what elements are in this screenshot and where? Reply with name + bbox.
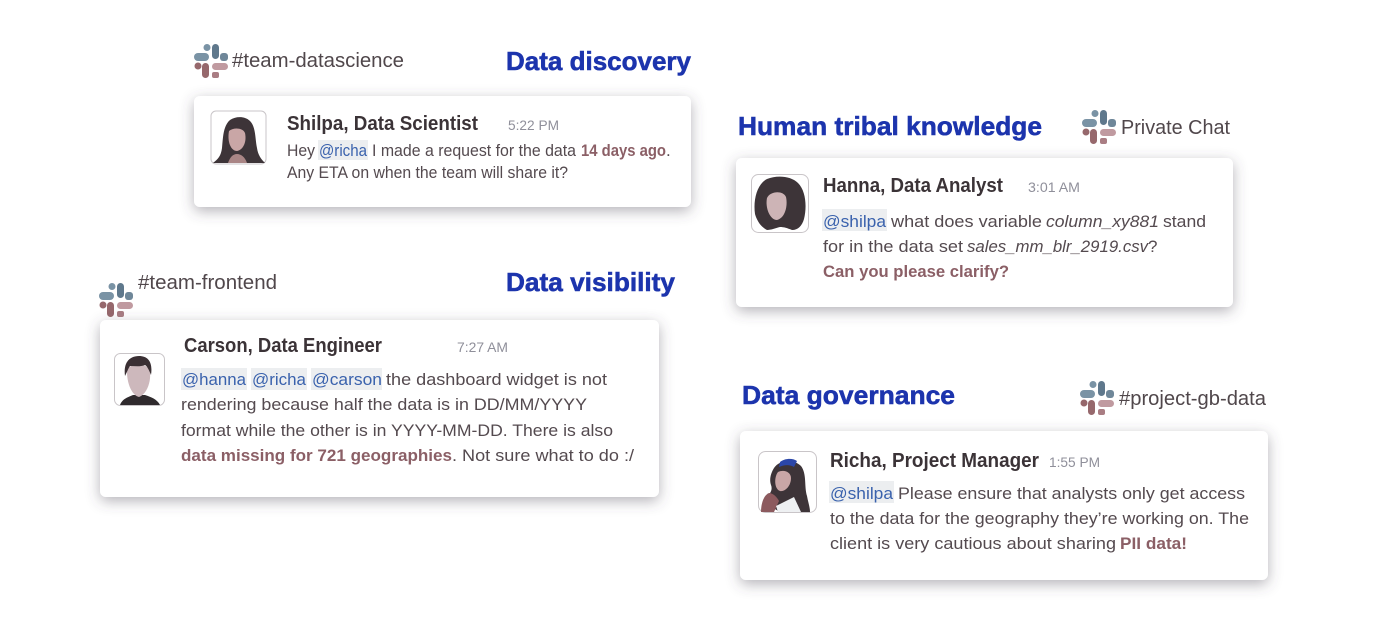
panel: data governance (740, 380, 1268, 580)
message text: @hanna (182, 370, 247, 389)
author: Richa, Project Manager (830, 450, 1039, 472)
channel name: #team-datascience (232, 50, 404, 72)
message text: @richa (319, 141, 367, 160)
timestamp: 1:55 PM (1049, 454, 1100, 470)
message card (736, 158, 1233, 307)
message text (829, 481, 1249, 553)
message text: @shilpa (823, 212, 887, 231)
message text: @richa (252, 370, 307, 389)
message text: column_xy881 (1046, 212, 1159, 231)
message text: Can you please clarify? (823, 262, 1009, 281)
message text: . Not sure what to do :/ (452, 446, 634, 465)
timestamp: 3:01 AM (1028, 179, 1080, 195)
message text: @carson (312, 370, 382, 389)
heading: Data visibility (506, 267, 676, 297)
avatar: Shilpa (211, 111, 266, 164)
channel icon: slack logo (194, 44, 228, 78)
message text: format while the other is in YYYY-MM-DD. There is also (181, 421, 613, 440)
heading: Data discovery (506, 46, 692, 76)
message text: for in the data set (823, 237, 963, 256)
timestamp: 5:22 PM (508, 117, 559, 133)
message text: rendering because half the data is in DD/MM/YYYY (181, 395, 587, 414)
message text: ? (1148, 237, 1157, 256)
message text: client is very cautious about sharing (830, 534, 1116, 553)
message text: what does variable (890, 212, 1042, 231)
channel icon: slack logo (99, 283, 133, 317)
message card (740, 431, 1268, 580)
message card (100, 320, 659, 497)
author: Carson, Data Engineer (184, 335, 382, 357)
message text: Hey (287, 141, 315, 160)
channel icon: slack logo (1080, 381, 1114, 415)
message text (181, 368, 634, 465)
message text: to the data for the geography they’re working on. The (830, 509, 1249, 528)
channel name: Private Chat (1121, 117, 1230, 139)
heading: Human tribal knowledge (738, 111, 1042, 141)
panel: data visibility (99, 267, 676, 497)
avatar: Richa (758, 452, 816, 512)
message text: sales_mm_blr_2919.csv (967, 237, 1149, 256)
message text: data missing for 721 geographies (181, 446, 452, 465)
panel: data discovery (194, 44, 692, 207)
channel name: #team-frontend (138, 272, 277, 294)
message text: I made a request for the data (372, 141, 577, 160)
message text: the dashboard widget is not (386, 370, 607, 389)
heading: Data governance (742, 380, 955, 410)
message text: . (666, 141, 671, 160)
message text (822, 209, 1206, 281)
channel name: #project-gb-data (1119, 388, 1267, 410)
author: Shilpa, Data Scientist (287, 113, 478, 135)
message text: @shilpa (830, 484, 894, 503)
message text: PII data! (1120, 534, 1187, 553)
avatar: Hanna (752, 174, 808, 232)
panel: human tribal knowledge (736, 110, 1233, 307)
message text (287, 140, 671, 182)
message text: stand (1163, 212, 1206, 231)
timestamp: 7:27 AM (457, 339, 508, 355)
message card (194, 96, 691, 207)
channel icon: slack logo (1082, 110, 1116, 144)
message text: Please ensure that analysts only get access (898, 484, 1245, 503)
message text: 14 days ago (581, 141, 666, 160)
author: Hanna, Data Analyst (823, 175, 1003, 197)
avatar: Carson (114, 354, 164, 406)
message text: Any ETA on when the team will share it? (287, 163, 568, 182)
